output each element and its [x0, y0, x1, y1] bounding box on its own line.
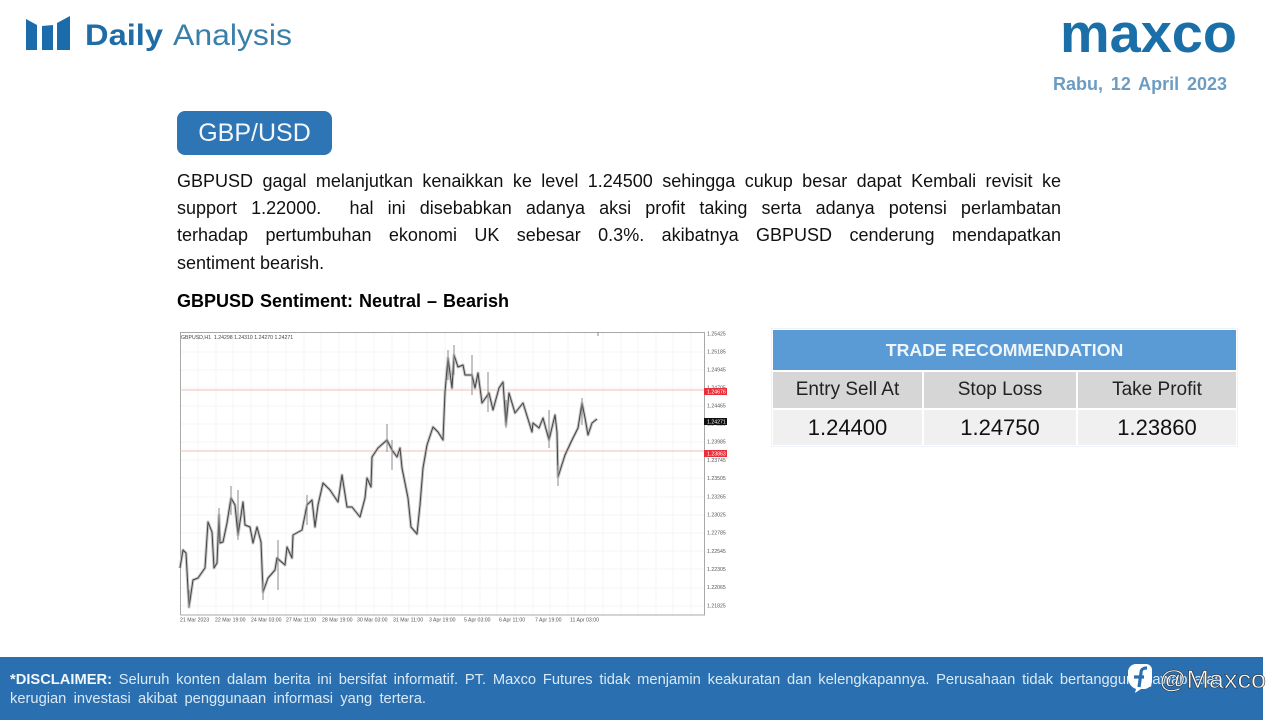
price tag: current: 1.24271: [707, 420, 726, 426]
candle wicks: [189, 332, 598, 608]
time axis labels: 7 Apr 19:00: [535, 618, 562, 624]
price axis labels: 1.21825: [707, 604, 726, 610]
body paragraph: terhadap pertumbuhan ekonomi UK sebesar 0.3%. akibatnya GBPUSD cenderung mendapatkan: [177, 225, 1061, 245]
value: stop loss: [924, 410, 1076, 445]
price axis labels: 1.23265: [707, 494, 726, 500]
time axis labels: 3 Apr 19:00: [429, 618, 456, 624]
price axis labels: 1.23985: [707, 440, 726, 446]
price axis labels: 1.22305: [707, 567, 726, 573]
time axis labels: 30 Mar 03:00: [357, 618, 388, 624]
logo wordmark: [85, 19, 292, 52]
time axis labels: 11 Apr 03:00: [570, 618, 599, 624]
label: entry: [773, 372, 922, 408]
price tag: upper red: [704, 388, 727, 396]
price axis labels: 1.22545: [707, 549, 726, 555]
price axis labels: [707, 332, 726, 610]
price chart: GBPUSD H1: [178, 332, 727, 624]
chart header text: GBPUSD,H1 1.24298 1.24310 1.24270 1.24271: [181, 335, 293, 341]
sentiment line: GBPUSD Sentiment: Neutral – Bearish: [177, 291, 509, 311]
icon: facebook: [1128, 664, 1152, 693]
body paragraph: GBPUSD gagal melanjutkan kenaikkan ke level 1.24500 sehingga cukup besar dapat Kembali revisit ke: [177, 171, 1061, 191]
value: entry: [773, 410, 922, 445]
time axis labels: 31 Mar 11:00: [393, 618, 423, 624]
social handle: Facebook: [1128, 664, 1266, 694]
price axis labels: 1.22785: [707, 530, 726, 536]
price axis labels: 1.25425: [707, 332, 726, 338]
time axis labels: 28 Mar 19:00: [322, 618, 353, 624]
disclaimer text: kerugian investasi akibat penggunaan informasi yang tertera.: [10, 691, 426, 707]
price axis labels: 1.24465: [707, 404, 726, 410]
value: take profit: 1.23860: [1117, 414, 1197, 440]
price tag: lower red: 1.23863: [707, 452, 726, 458]
label: stop loss: [924, 372, 1076, 408]
time axis labels: 21 Mar 2023: [180, 618, 209, 624]
logo wordmark: Daily: [85, 19, 163, 52]
trade recommendation table: [771, 328, 1238, 447]
price axis labels: 1.23025: [707, 512, 726, 518]
price series: [180, 355, 597, 607]
disclaimer text: [10, 672, 1222, 707]
label: stop loss: Stop Loss: [958, 379, 1042, 400]
value: stop loss: 1.24750: [960, 414, 1040, 440]
time axis labels: [180, 618, 599, 624]
heading badge: GBP/USD: [177, 111, 332, 155]
time axis labels: 22 Mar 19:00: [215, 618, 246, 624]
chart frame: [180, 332, 704, 615]
body paragraph: sentiment bearish.: [177, 253, 324, 273]
price axis labels: 1.24225: [707, 422, 726, 428]
price axis labels: 1.23505: [707, 476, 726, 482]
time axis labels: 6 Apr 11:00: [499, 618, 525, 624]
price tag: lower red: [704, 450, 727, 458]
handle text: @Maxco: [1159, 666, 1266, 694]
time axis labels: 24 Mar 03:00: [251, 618, 282, 624]
icon: bars: [26, 16, 70, 50]
value: entry: 1.24400: [808, 414, 887, 440]
body paragraph: [177, 171, 1061, 273]
logo: Daily Analysis: [26, 16, 292, 52]
price axis labels: 1.22065: [707, 585, 726, 591]
heading badge: GBP/USD: GBP/USD: [198, 119, 311, 147]
support and resistance lines: [180, 390, 704, 451]
price axis labels: 1.24705: [707, 386, 726, 392]
time axis labels: 5 Apr 03:00: [464, 618, 491, 624]
price series shadow: [180, 355, 597, 607]
disclaimer text: *DISCLAIMER: Seluruh konten dalam berita ini bersifat informatif. PT. Maxco Futures tidak menjamin keakuratan dan kelengkapannya. Perusahaan tidak bertanggung jawab atas: [10, 672, 1222, 688]
logo wordmark: Analysis: [173, 19, 292, 52]
value: take profit: [1078, 410, 1236, 445]
table header: TRADE RECOMMENDATION: [886, 340, 1123, 360]
price axis labels: 1.24945: [707, 368, 726, 374]
label: take profit: [1078, 372, 1236, 408]
price tag: current: [704, 418, 727, 426]
disclaimer footer: [0, 657, 1263, 720]
date: Rabu, 12 April 2023: [1053, 74, 1227, 94]
table header: [773, 330, 1236, 370]
price axis labels: 1.25185: [707, 350, 726, 356]
price axis labels: 1.23745: [707, 458, 726, 464]
time axis labels: 27 Mar 11:00: [286, 618, 316, 624]
price tag: upper red: 1.24676: [707, 390, 726, 396]
label: entry: Entry Sell At: [796, 379, 899, 400]
body paragraph: support 1.22000. hal ini disebabkan adanya aksi profit taking serta adanya potensi perlambatan: [177, 198, 1061, 218]
label: take profit: Take Profit: [1112, 379, 1202, 400]
